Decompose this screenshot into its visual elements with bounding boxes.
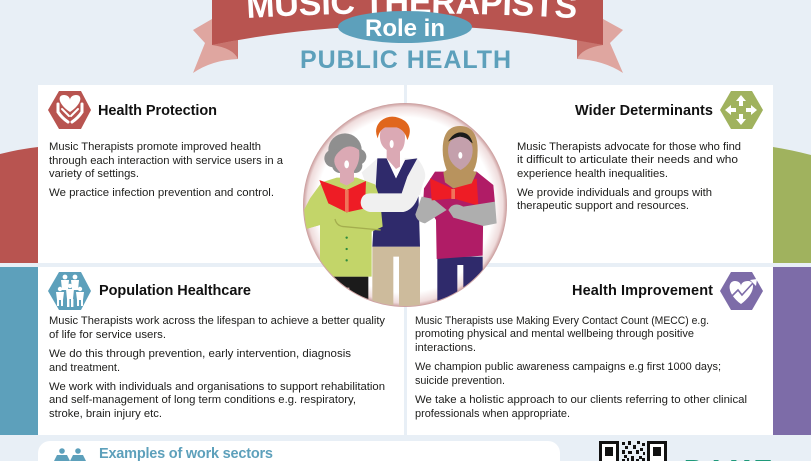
subtitle: public health: PUBLIC HEALTH xyxy=(300,46,511,74)
ribbon tail right xyxy=(577,19,623,73)
text: population healthcare body: and self-management of long term conditions e.g. respiratory, xyxy=(49,394,356,406)
text: health protection body: We practice infection prevention and control. xyxy=(49,187,274,199)
text: health improvement body: suicide prevention. xyxy=(415,375,505,387)
text: population healthcare body: We do this through prevention, early intervention, diagnosis xyxy=(49,348,351,360)
text: health protection body: Music Therapists promote improved health xyxy=(49,141,261,153)
text: population healthcare body: stroke, brain injury etc. xyxy=(49,408,162,420)
text: health protection body: through each interaction with service users in a xyxy=(49,155,284,167)
text: health improvement body: interactions. xyxy=(415,342,476,354)
text: population healthcare body: We work with individuals and organisations to support rehabilitation xyxy=(49,381,385,393)
text: health improvement body: promoting physical and mental wellbeing through positive xyxy=(415,328,694,340)
left band: population healthcare colour xyxy=(0,267,38,435)
heading: wider determinants: Wider Determinants xyxy=(575,103,713,119)
figure: older woman in green xyxy=(304,133,383,303)
subtitle pill: role in xyxy=(338,11,472,43)
text: health improvement body: We champion public awareness campaigns e.g first 1000 days; xyxy=(415,361,721,373)
subtitle pill: role in: Role in xyxy=(365,15,445,42)
text: wider determinants body: it difficult to articulate their needs and who xyxy=(517,154,738,166)
text: wider determinants body: Music Therapists advocate for those who find xyxy=(517,141,741,153)
banner: music therapists ribbon xyxy=(193,0,623,73)
ribbon fold left xyxy=(212,40,238,59)
text: wider determinants body: experience health inequalities. xyxy=(517,168,668,180)
illustration: three singers in a circle xyxy=(303,103,507,308)
text: population healthcare body: of life for service users. xyxy=(49,329,166,341)
figure: man in navy vest xyxy=(362,117,425,308)
icon: people group xyxy=(54,448,86,461)
ribbon tail left xyxy=(193,19,238,73)
ribbon body xyxy=(212,0,603,45)
qr code xyxy=(599,441,667,461)
text: wider determinants body xyxy=(517,141,741,212)
text: health protection body: variety of settings. xyxy=(49,168,139,180)
text: wider determinants body: therapeutic support and resources. xyxy=(517,200,689,212)
right band: health improvement colour xyxy=(773,267,811,435)
icon: four arrows xyxy=(720,91,763,129)
text: population healthcare body: Music Therapists work across the lifespan to achieve a better quality xyxy=(49,315,385,327)
heading: population healthcare: Population Healthcare xyxy=(99,283,251,299)
text: health improvement body: Music Therapists use Making Every Contact Count (MECC) e.g. xyxy=(415,315,709,327)
right band: wider determinants colour xyxy=(773,147,811,263)
text: health improvement body: professionals when appropriate. xyxy=(415,408,570,420)
text: population healthcare body: and treatment. xyxy=(49,362,120,374)
heading: health improvement: Health Improvement xyxy=(572,283,713,299)
panel: examples of work sectors xyxy=(38,441,560,461)
text: health protection body xyxy=(49,141,284,199)
panel: wider determinants xyxy=(407,85,773,263)
left band: health protection colour xyxy=(0,147,38,263)
icon: heart with rising arrow xyxy=(720,272,763,310)
icon: heart in hands xyxy=(48,91,91,129)
panel: health improvement xyxy=(407,267,773,435)
icon: group of people xyxy=(48,272,91,310)
figure: woman in hijab and magenta top xyxy=(415,126,497,303)
panel: health protection xyxy=(38,85,404,263)
text: health improvement body xyxy=(415,315,747,420)
text: population healthcare body xyxy=(49,315,385,420)
heading: health protection: Health Protection xyxy=(98,103,217,119)
text: health improvement body: We take a holistic approach to our clients referring to other clinical xyxy=(415,394,747,406)
text: wider determinants body: We provide individuals and groups with xyxy=(517,187,712,199)
ribbon fold right xyxy=(577,40,603,59)
man's sleeve reaching across xyxy=(361,158,425,212)
panel: population healthcare xyxy=(38,267,404,435)
